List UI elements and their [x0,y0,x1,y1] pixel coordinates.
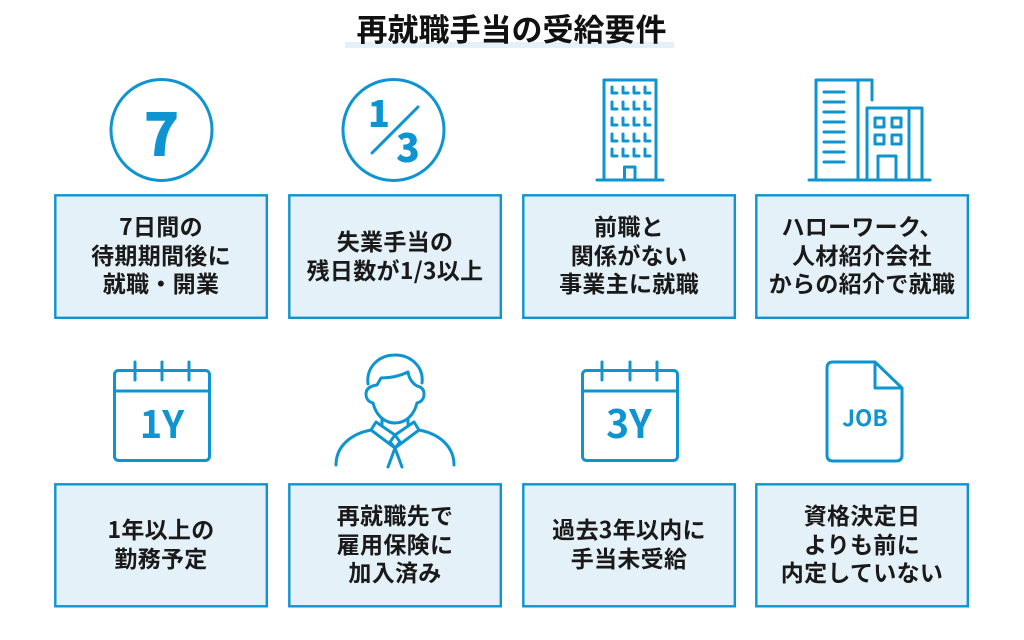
icon: circle with 1/3: 1 [368,86,390,138]
panel: no prior offer: 内定していない [781,554,943,588]
panel: no prior offer: よりも前に [804,526,920,560]
icon: two company buildings [809,80,930,180]
icon: person with tie [336,355,454,467]
panel: one year employment: 1年以上の [107,511,215,545]
panel: unrelated employer: 関係がない [571,237,687,271]
panel: no prior offer [756,484,968,606]
panel: hello work referral: からの紹介で就職 [769,265,955,299]
icon: JOB document [827,362,902,461]
panel: past three years [523,484,735,606]
icon: circle with 7 [111,80,212,180]
panel: remaining days [289,195,501,318]
panel: 7 days waiting: 7日間の [119,208,203,242]
icon: calendar 1Y [114,362,210,460]
icon: circle with 1/3: 3 [396,118,420,174]
panel: no prior offer: 資格決定日 [804,497,920,531]
panel: hello work referral [756,195,968,318]
panel: hello work referral: ハローワーク、 [781,208,943,242]
panel: 7 days waiting: 就職・開業 [103,265,219,299]
icon: calendar 3Y [582,362,678,460]
panel: 7 days waiting [55,195,267,318]
panel: remaining days: 失業手当の [337,223,453,257]
panel: past three years: 手当未受給 [571,540,687,574]
panel: unrelated employer: 前職と [594,208,664,242]
panel: employment insurance: 加入済み [348,554,442,588]
panel: past three years: 過去3年以内に [552,511,706,545]
icon: tall office building [597,80,663,180]
panel: employment insurance [289,484,501,606]
panel: unrelated employer: 事業主に就職 [559,265,699,299]
panel: remaining days: 残日数が1/3以上 [307,252,483,286]
icon: circle with 1/3 [343,80,444,180]
panel: employment insurance: 雇用保険に [337,526,453,560]
panel: one year employment [55,484,267,606]
icon: calendar 1Y: 1Y [140,394,185,449]
panel: unrelated employer [523,195,735,318]
icon: circle with 7: 7 [144,88,179,173]
panel: one year employment: 勤務予定 [114,540,208,574]
panel: employment insurance: 再就職先で [337,497,453,531]
panel: hello work referral: 人材紹介会社 [792,237,932,271]
title: 再就職手当の受給要件 [356,5,666,50]
icon: JOB document: JOB [842,401,888,433]
icon: calendar 3Y: 3Y [606,394,652,450]
panel: 7 days waiting: 待期期間後に [91,237,231,271]
